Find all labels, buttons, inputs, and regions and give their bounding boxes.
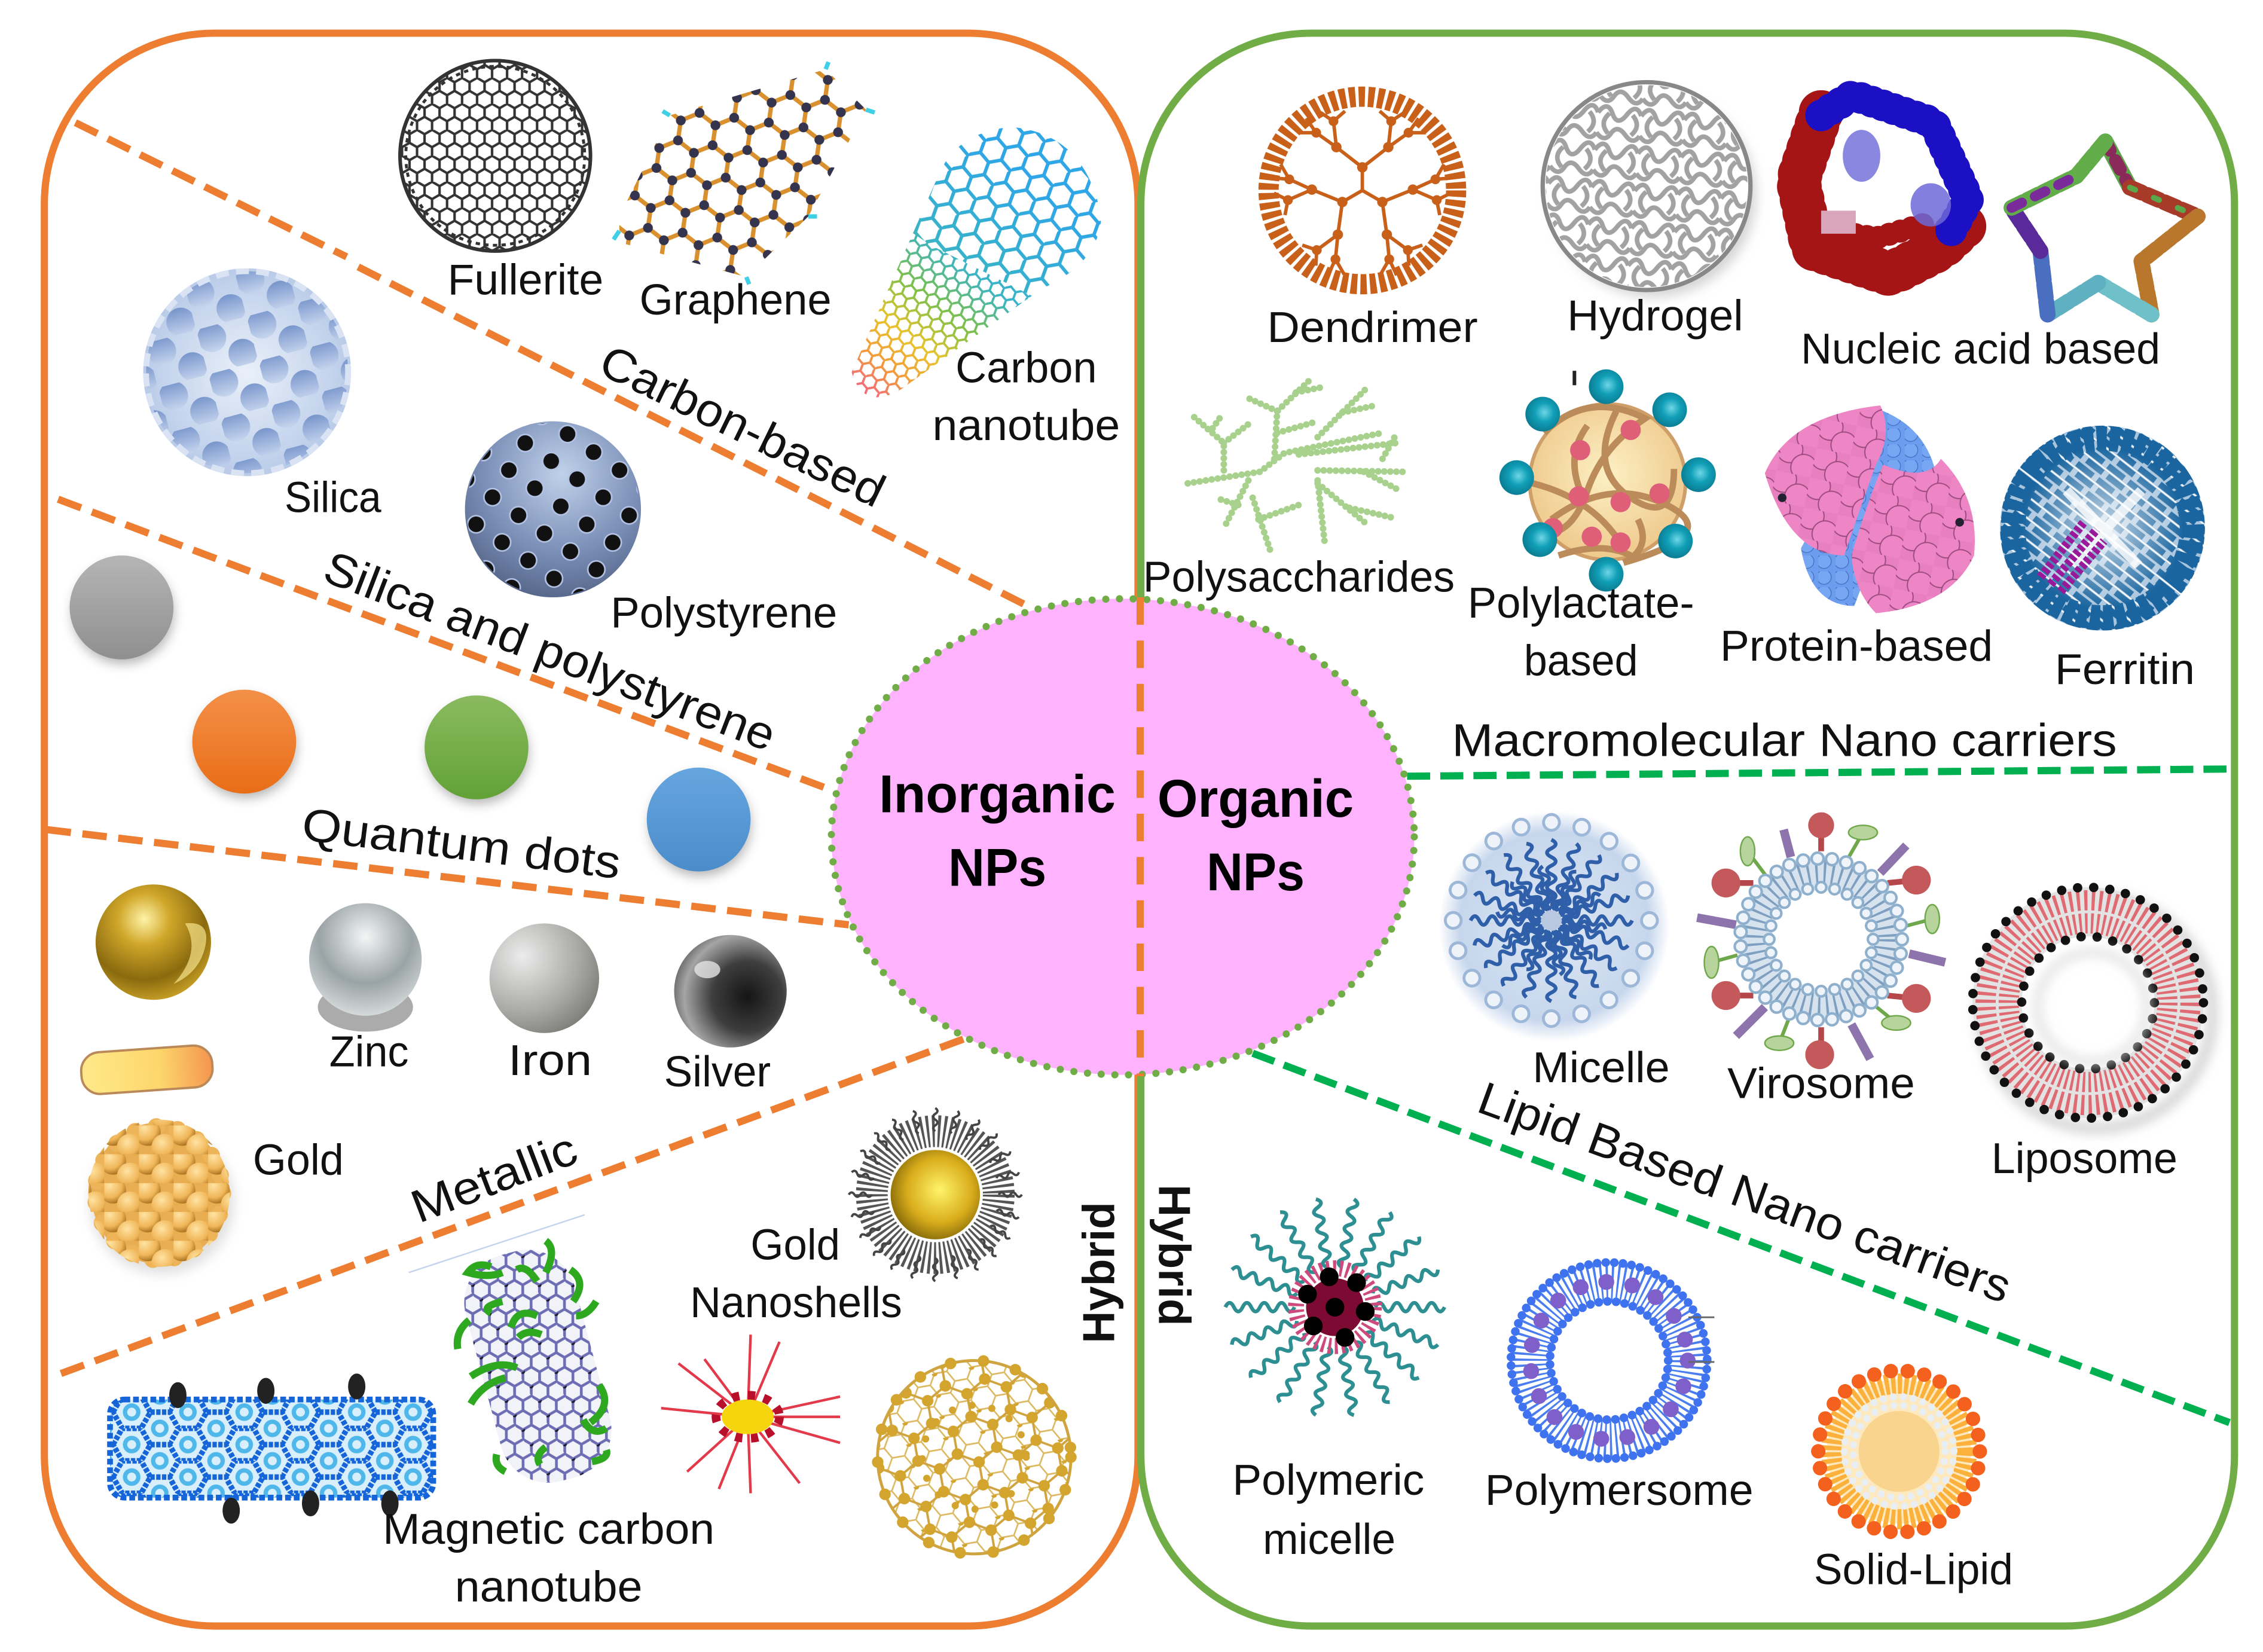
label: Silica: Silica xyxy=(285,474,381,522)
icon: hydrogel xyxy=(1543,83,1756,297)
icon: functionalised nanotube xyxy=(409,1215,622,1494)
panel: inorganic nanoparticles xyxy=(44,33,1138,1626)
heading: Carbon-based: Carbon-based xyxy=(592,335,893,517)
label: Nucleic acid based: Nucleic acid based xyxy=(1801,325,2160,373)
heading: Lipid Based Nano carriers: Lipid Based Nano carriers xyxy=(1471,1072,2018,1313)
icon: magnetic nanotube blue xyxy=(110,1373,433,1523)
label: Polystyrene: Polystyrene xyxy=(610,589,837,637)
icon: ferritin xyxy=(2000,426,2205,631)
label: Nanoshells: Nanoshells xyxy=(690,1278,902,1327)
label: Micelle: Micelle xyxy=(1532,1043,1670,1092)
icon: graphene xyxy=(613,62,875,284)
label: NPs (inorganic): NPs xyxy=(948,838,1046,897)
label: Zinc: Zinc xyxy=(329,1027,409,1076)
label: Fullerite: Fullerite xyxy=(448,255,603,304)
icon: zinc sphere xyxy=(309,903,422,1031)
central ellipse xyxy=(832,597,1414,1076)
icon: gold cluster xyxy=(80,1114,239,1280)
label: Organic: Organic xyxy=(1158,768,1354,828)
icon: gold nanoshell xyxy=(849,1108,1022,1281)
icon: quantum dot orange xyxy=(193,689,296,798)
label: nanotube: nanotube xyxy=(932,401,1120,450)
icon: silica sphere xyxy=(143,268,351,476)
label: Carbon: Carbon xyxy=(955,343,1097,392)
central divider xyxy=(1138,597,1141,1076)
label: micelle: micelle xyxy=(1263,1515,1395,1564)
label: Inorganic: Inorganic xyxy=(879,764,1116,824)
icon: silver sphere xyxy=(674,935,787,1048)
label: Dendrimer: Dendrimer xyxy=(1267,303,1478,352)
heading: Metallic: Metallic xyxy=(404,1123,584,1233)
icon: quantum dot gray xyxy=(69,555,173,664)
label: nanotube second line: nanotube xyxy=(455,1563,642,1611)
icon: polymeric micelle xyxy=(1225,1198,1444,1416)
heading: Macromolecular Nano carriers: Macromolecular Nano carriers xyxy=(1452,714,2117,766)
label: Gold: Gold xyxy=(253,1135,344,1184)
heading: Hybrid (inorganic): Hybrid xyxy=(1074,1202,1124,1343)
label: Iron: Iron xyxy=(508,1036,592,1085)
label: Silver: Silver xyxy=(664,1048,771,1096)
icon: quantum dot green xyxy=(424,695,529,804)
icon: gold rod xyxy=(80,1045,214,1095)
heading: Silica and polystyrene: Silica and polystyrene xyxy=(317,542,783,761)
label: based: based xyxy=(1524,636,1638,685)
divider: carbon-based xyxy=(75,123,1028,606)
divider: quantum dots xyxy=(47,830,849,925)
heading: Hybrid (organic): Hybrid xyxy=(1149,1184,1199,1326)
icon: polylactate particle xyxy=(1499,370,1716,591)
icon: fullerite xyxy=(399,59,592,252)
label: Magnetic carbon: Magnetic carbon xyxy=(383,1505,714,1553)
divider: macromolecular xyxy=(1407,769,2230,776)
divider: silica and polystyrene xyxy=(58,499,833,790)
label: Protein-based: Protein-based xyxy=(1720,622,1993,670)
divider: lipid based xyxy=(1253,1054,2230,1422)
label: Hydrogel: Hydrogel xyxy=(1567,292,1743,340)
panel: organic nanoparticles xyxy=(1141,33,2234,1626)
icon: nucleic acid ring xyxy=(1798,95,1971,274)
icon: polysaccharides xyxy=(1188,380,1404,549)
label: Virosome: Virosome xyxy=(1727,1059,1915,1107)
icon: virosome xyxy=(1697,813,1945,1069)
icon: quantum dot blue xyxy=(647,768,750,876)
label: Graphene: Graphene xyxy=(640,276,832,324)
icon: carbon nanotube xyxy=(851,127,1101,397)
icon: liposome xyxy=(1972,887,2212,1128)
icon: gold sphere xyxy=(96,884,211,1000)
label: Gold nanoshell first line: Gold xyxy=(750,1221,840,1269)
label: Polymeric: Polymeric xyxy=(1232,1456,1424,1504)
icon: polymersome xyxy=(1511,1262,1714,1459)
label: Solid-Lipid: Solid-Lipid xyxy=(1814,1546,2013,1594)
icon: iron sphere xyxy=(490,923,599,1033)
icon: micelle xyxy=(1439,811,1670,1042)
label: Polymersome: Polymersome xyxy=(1485,1466,1754,1514)
label: Polysaccharides: Polysaccharides xyxy=(1143,552,1455,601)
icon: protein xyxy=(1765,405,1975,613)
label: Liposome: Liposome xyxy=(1992,1134,2178,1183)
icon: solid lipid xyxy=(1818,1370,1980,1532)
heading: Quantum dots: Quantum dots xyxy=(299,799,624,889)
label: Ferritin: Ferritin xyxy=(2055,645,2195,694)
icon: gold fullerene xyxy=(878,1361,1071,1554)
icon: polystyrene sphere xyxy=(465,422,641,597)
icon: star nanoparticle xyxy=(661,1335,840,1494)
label: Polylactate-: Polylactate- xyxy=(1468,579,1694,627)
label: NPs (organic): NPs xyxy=(1207,842,1305,902)
icon: nucleic acid star xyxy=(2011,141,2198,314)
divider: metallic xyxy=(61,1039,964,1373)
icon: dendrimer xyxy=(1262,97,1463,285)
